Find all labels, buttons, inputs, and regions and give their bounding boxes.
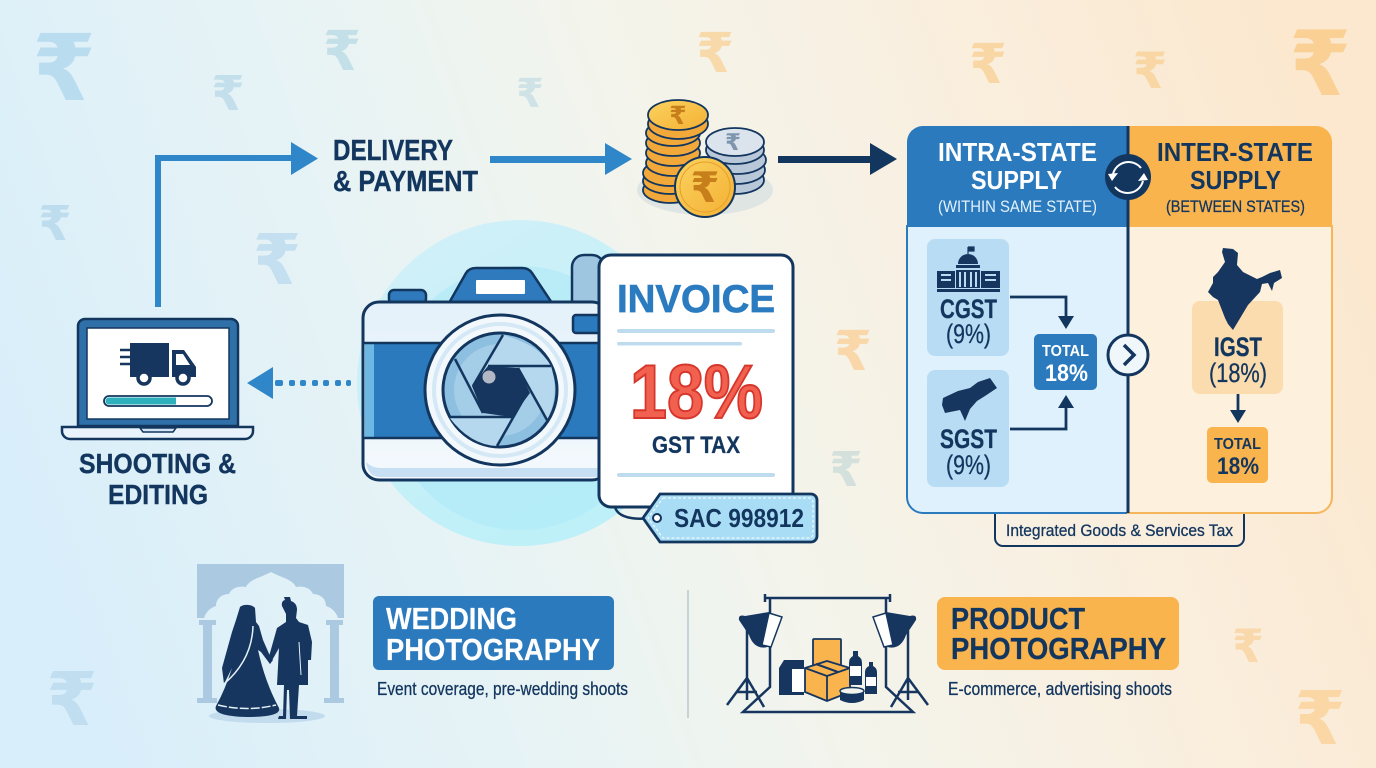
- bracket: integrated goods and services tax: [995, 512, 1244, 546]
- total box: 18%: [1217, 453, 1259, 480]
- background rupee symbols: ₹: [32, 18, 96, 120]
- camera glow halo: [357, 220, 683, 546]
- panel: inter-state supply: (BETWEEN STATES): [1166, 197, 1305, 216]
- background rupee symbols: ₹: [1289, 15, 1351, 115]
- progress bar: [104, 396, 212, 406]
- right studio light: [873, 612, 928, 707]
- invoice title: INVOICE: [617, 278, 775, 321]
- icon: coin stacks: ₹: [690, 164, 720, 211]
- arrow: coins to supply panel: [778, 143, 897, 175]
- label: product photography: PHOTOGRAPHY: [951, 631, 1166, 666]
- background rupee symbols: ₹: [1133, 43, 1167, 99]
- GST tax label: GST TAX: [652, 432, 740, 459]
- background rupee symbols: ₹: [38, 198, 72, 251]
- label: product photography: [937, 597, 1179, 670]
- heading: shooting and editing: [79, 448, 236, 510]
- label: wedding photography: WEDDING: [386, 601, 517, 636]
- IGST box: (18%): [1209, 358, 1267, 388]
- background rupee symbols: ₹: [834, 320, 872, 382]
- total box: TOTAL: [1214, 436, 1261, 453]
- icon: camera: [363, 255, 608, 480]
- arrow: dotted camera to laptop: [247, 367, 351, 399]
- icon: product photography setup: [727, 594, 928, 712]
- background rupee symbols: ₹: [323, 20, 361, 82]
- panel: supply comparison: [907, 126, 1332, 513]
- groom: [268, 597, 312, 719]
- total box: [1207, 427, 1268, 483]
- panel: inter-state supply: [1128, 126, 1332, 513]
- icon: coin stacks: [637, 100, 773, 217]
- icon: coin stacks: ₹: [669, 102, 687, 130]
- background rupee symbols: ₹: [1294, 677, 1346, 760]
- background rupee symbols: ₹: [46, 658, 98, 741]
- icon: chevron circle: [1108, 335, 1148, 375]
- arrow to total: [1230, 394, 1246, 423]
- left studio light: [727, 612, 782, 707]
- panel: intra-state supply: [907, 126, 1128, 513]
- background rupee symbols: ₹: [253, 221, 301, 299]
- panel: intra-state supply: INTRA-STATE: [938, 137, 1097, 167]
- camera lens: [425, 315, 575, 465]
- heading: delivery and payment: & PAYMENT: [333, 166, 478, 198]
- background rupee symbols: ₹: [696, 22, 734, 84]
- icon: wedding couple under arch: [197, 564, 344, 723]
- tag: SAC code: SAC 998912: [674, 503, 804, 533]
- panel: intra-state supply: (WITHIN SAME STATE): [938, 197, 1097, 216]
- CGST box: [927, 239, 1009, 356]
- background rupee symbols: ₹: [1232, 620, 1264, 672]
- tax rate: 18%: [630, 350, 763, 435]
- IGST box: IGST: [1214, 332, 1262, 362]
- IGST box: [1192, 248, 1283, 394]
- SGST box: (9%): [946, 450, 991, 480]
- SGST box: [927, 370, 1009, 487]
- label: wedding photography: PHOTOGRAPHY: [386, 632, 600, 667]
- bracket: integrated goods and services tax: Integrated Goods & Services Tax: [1006, 521, 1233, 540]
- icon: laptop with delivery truck: [62, 319, 253, 439]
- text: product description: E-commerce, advertising shoots: [948, 679, 1172, 699]
- bride: [216, 605, 279, 717]
- label: wedding photography: [373, 596, 614, 670]
- heading: delivery and payment: DELIVERY: [333, 135, 453, 167]
- icon: truck: [120, 343, 196, 384]
- connector arrows to total: [1010, 297, 1074, 429]
- icon: coin stacks: ₹: [725, 129, 741, 155]
- panel: intra-state supply: SUPPLY: [971, 165, 1062, 195]
- icon: swap circle: [1105, 154, 1151, 200]
- background rupee symbols: ₹: [211, 68, 245, 121]
- products: [779, 639, 877, 703]
- text: wedding description: Event coverage, pre-wedding shoots: [377, 679, 628, 699]
- background rupee symbols: ₹: [516, 72, 544, 116]
- total box: TOTAL: [1042, 343, 1089, 360]
- total box: 18%: [1045, 360, 1088, 387]
- CGST box: CGST: [940, 294, 997, 324]
- panel: inter-state supply: INTER-STATE: [1157, 137, 1313, 167]
- SGST box: SGST: [940, 424, 997, 454]
- panel: inter-state supply: SUPPLY: [1190, 165, 1281, 195]
- CGST box: (9%): [946, 319, 991, 349]
- total box: [1034, 334, 1097, 390]
- heading: shooting and editing: SHOOTING &: [79, 448, 236, 479]
- background rupee symbols: ₹: [969, 33, 1007, 95]
- label: product photography: PRODUCT: [951, 601, 1085, 636]
- invoice document: [599, 255, 793, 519]
- arrow: shooting to delivery: [158, 142, 318, 307]
- tag: SAC code: [643, 494, 817, 542]
- background rupee symbols: ₹: [829, 444, 863, 497]
- heading: shooting and editing: EDITING: [108, 479, 208, 510]
- heading: delivery and payment: [333, 135, 478, 198]
- arrow: delivery to coins: [490, 143, 632, 175]
